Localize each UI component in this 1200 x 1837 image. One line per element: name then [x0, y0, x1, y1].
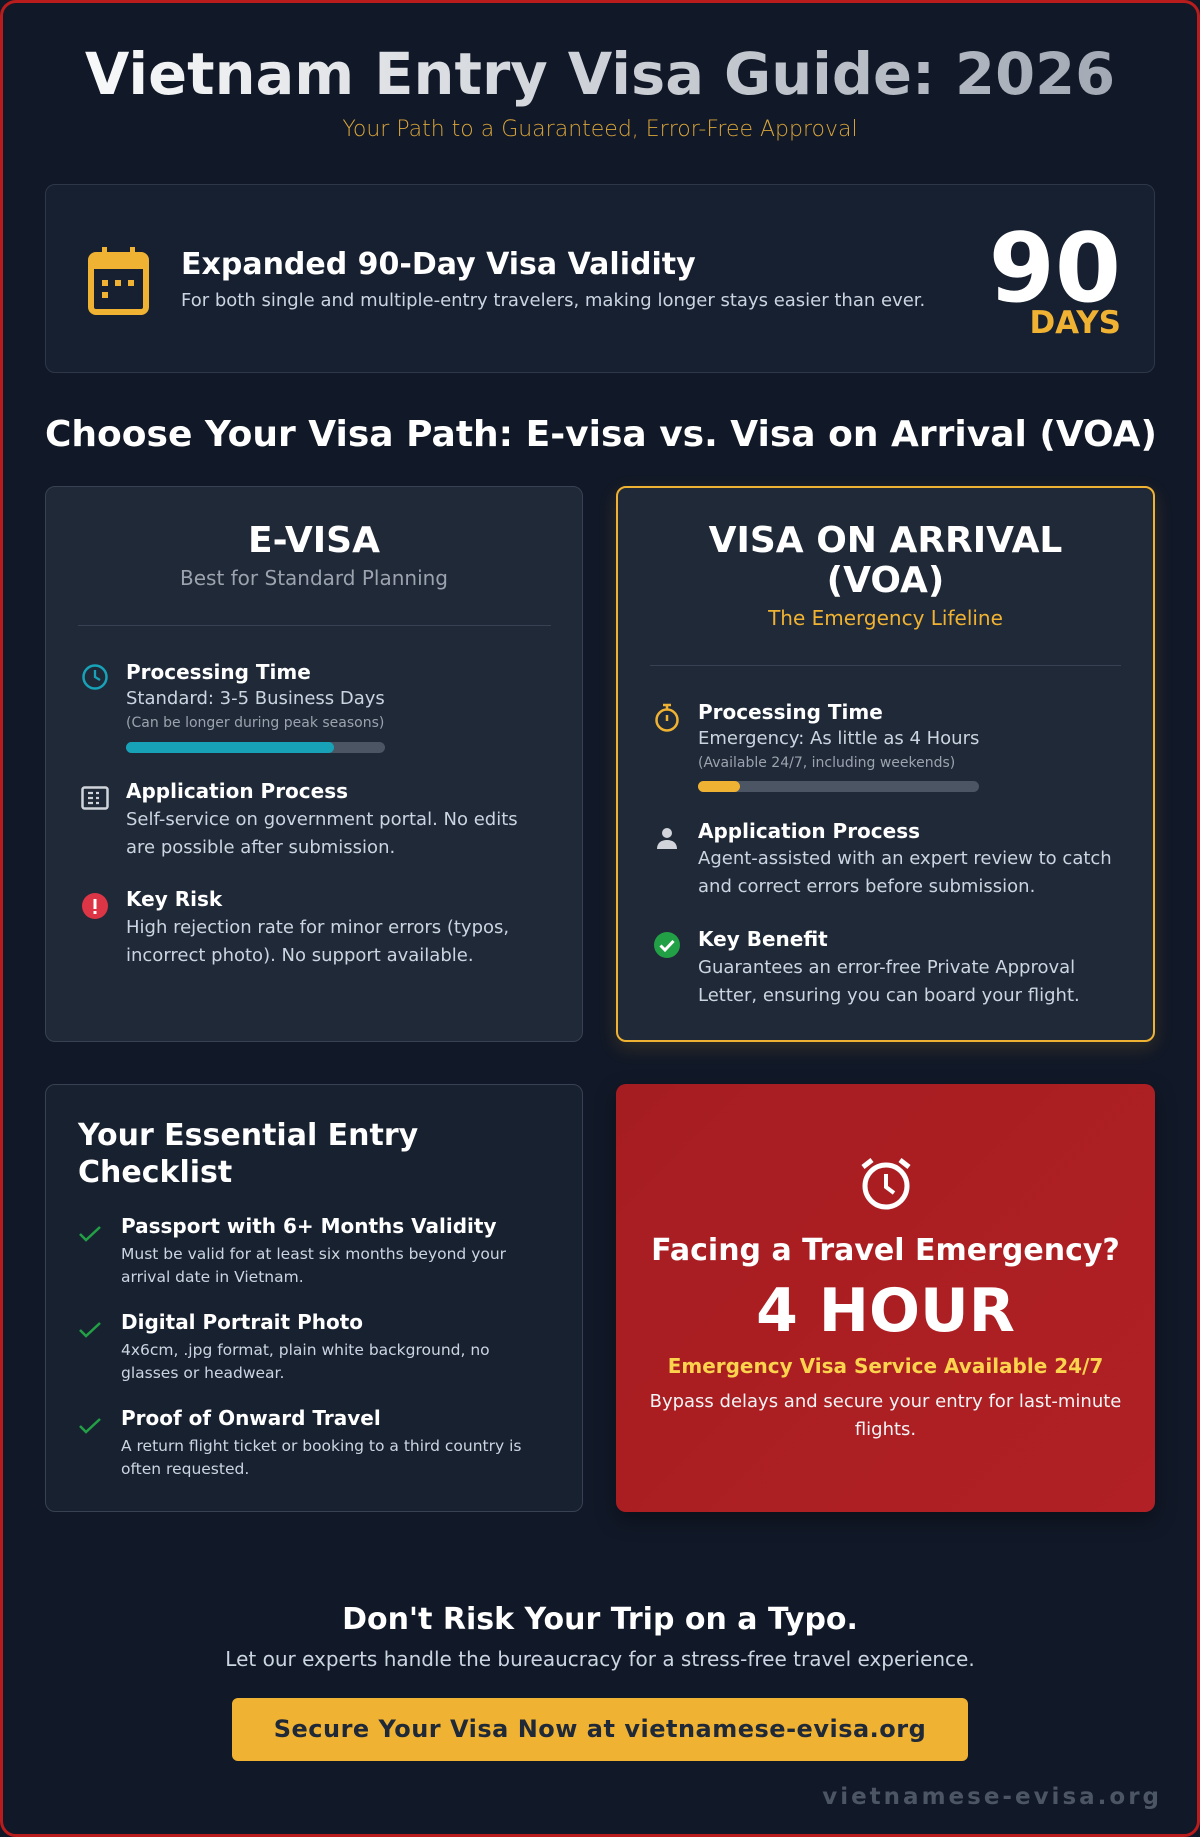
icon: person: [657, 828, 677, 849]
e-visa title: E-VISA: [248, 520, 380, 561]
item: photo: [79, 1310, 490, 1382]
item: onward travel: often requested.: [121, 1460, 249, 1478]
panel: visa on arrival: and correct errors before submission.: [698, 876, 1035, 897]
panel: e-visa: Self-service on government portal. No edits: [126, 809, 518, 830]
callout text: Bypass delays and secure your entry for last-minute: [650, 1391, 1121, 1412]
item: key risk: Key Risk: [126, 887, 222, 911]
panel: e-visa: Standard: 3-5 Business Days: [126, 688, 385, 709]
checklist title: [78, 1118, 418, 1190]
item: photo: glasses or headwear.: [121, 1364, 284, 1382]
panel: visa on arrival: Letter, ensuring you can board your flight.: [698, 985, 1080, 1006]
panel: e-visa: (Can be longer during peak seasons): [126, 715, 384, 731]
panel: e-visa: are possible after submission.: [126, 837, 395, 858]
watermark: vietnamese-evisa.org: [822, 1784, 1162, 1810]
callout subheading: Emergency Visa Service Available 24/7: [668, 1354, 1103, 1378]
panel: visa on arrival: Emergency: As little as 4 Hours: [698, 728, 979, 749]
item: key benefit: Key Benefit: [698, 927, 828, 951]
panel: visa on arrival: Guarantees an error-free Private Approval: [698, 957, 1075, 978]
item: onward travel: Proof of Onward Travel: [121, 1406, 381, 1430]
icon: warning: [82, 893, 108, 919]
item: onward travel: A return flight ticket or booking to a third country is: [121, 1437, 522, 1455]
panel: visa on arrival: (Available 24/7, including weekends): [698, 755, 955, 771]
item: passport: arrival date in Vietnam.: [121, 1268, 304, 1286]
icon: clock: [82, 664, 108, 690]
banner heading: Expanded 90-Day Visa Validity: [181, 247, 696, 282]
cta text: Let our experts handle the bureaucracy for a stress-free travel experience.: [225, 1647, 975, 1671]
cta button: [232, 1698, 968, 1761]
panel: visa on arrival: Agent-assisted with an expert review to catch: [698, 848, 1112, 869]
panel: e-visa: High rejection rate for minor errors (typos,: [126, 917, 509, 938]
icon: stopwatch: [655, 704, 679, 732]
item: onward travel: [79, 1406, 522, 1478]
voa subtitle: The Emergency Lifeline: [768, 606, 1003, 630]
big number 90: 90: [989, 214, 1121, 324]
item: passport: Must be valid for at least six months beyond your: [121, 1245, 506, 1263]
checklist title: Your Essential Entry: [78, 1118, 418, 1153]
checklist title: Checklist: [78, 1155, 232, 1190]
item: processing time: Processing Time: [698, 700, 883, 724]
big 4 HOUR: 4 HOUR: [756, 1276, 1015, 1346]
progress bar: voa: [698, 781, 979, 792]
voa title: [708, 520, 1062, 601]
item: application process: Application Process: [126, 779, 348, 803]
callout heading: Facing a Travel Emergency?: [651, 1233, 1120, 1268]
e-visa subtitle: Best for Standard Planning: [180, 566, 448, 590]
voa title: VISA ON ARRIVAL: [709, 520, 1062, 561]
DAYS label: DAYS: [1029, 305, 1121, 341]
title: Vietnam Entry Visa Guide: 2026: [85, 41, 1115, 108]
item: photo: Digital Portrait Photo: [121, 1310, 363, 1334]
item: passport: [79, 1214, 506, 1286]
section heading: Choose Your Visa Path: E-visa vs. Visa on Arrival (VOA): [45, 414, 1157, 455]
panel: checklist: [45, 1084, 583, 1512]
icon: check circle: [654, 932, 680, 958]
voa title: (VOA): [827, 560, 944, 601]
icon: form: [81, 786, 109, 810]
item: application process: Application Process: [698, 819, 920, 843]
banner text: For both single and multiple-entry travelers, making longer stays easier than ever.: [181, 290, 925, 311]
cta button: Secure Your Visa Now at vietnamese-evisa.org: [274, 1715, 926, 1743]
panel: visa on arrival: [616, 486, 1155, 1042]
banner: 90-day validity: [45, 184, 1155, 373]
icon: alarm clock: [862, 1158, 910, 1210]
panel: emergency callout: [616, 1084, 1155, 1512]
subtitle: Your Path to a Guaranteed, Error-Free Approval: [342, 117, 858, 142]
icon: calendar: [88, 247, 149, 315]
progress bar: e-visa: [126, 742, 385, 753]
panel: e-visa: incorrect photo). No support available.: [126, 945, 474, 966]
item: processing time: Processing Time: [126, 660, 311, 684]
cta heading: Don't Risk Your Trip on a Typo.: [342, 1602, 858, 1637]
item: photo: 4x6cm, .jpg format, plain white background, no: [121, 1341, 490, 1359]
item: passport: Passport with 6+ Months Validity: [121, 1214, 497, 1238]
callout text: [650, 1391, 1121, 1440]
callout text: flights.: [855, 1419, 916, 1440]
panel: e-visa: [45, 486, 583, 1042]
